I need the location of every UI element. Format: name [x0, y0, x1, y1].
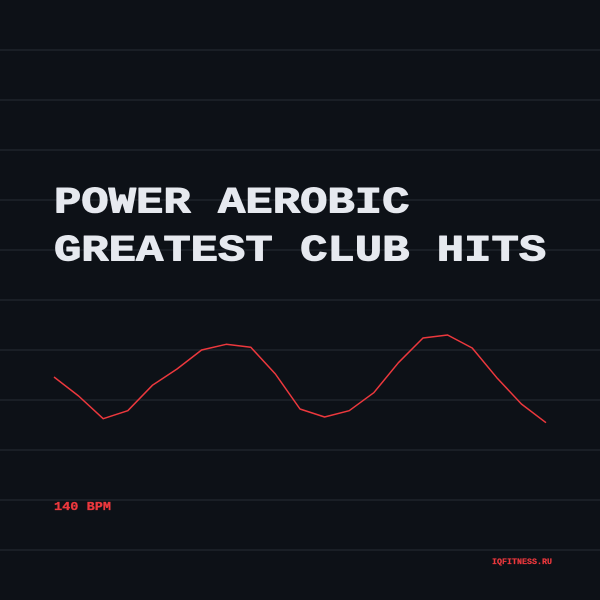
title	[54, 182, 546, 272]
title: POWER AEROBIC	[54, 182, 409, 224]
bpm label: 140 BPM	[54, 500, 111, 514]
source credit: IQFITNESS.RU	[492, 558, 552, 567]
line chart: tempo wave	[54, 335, 546, 423]
title: GREATEST CLUB HITS	[54, 230, 546, 272]
